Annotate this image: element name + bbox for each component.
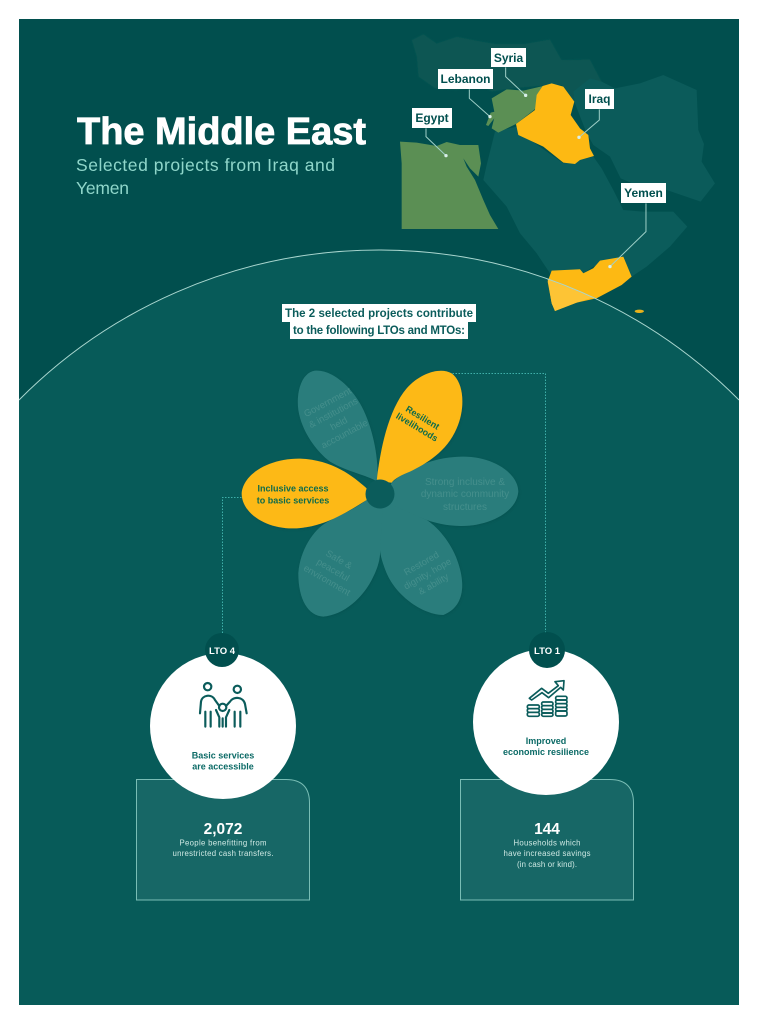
label: Yemen: Yemen [624, 186, 663, 200]
map: Syria [492, 86, 543, 133]
petal: governments [298, 371, 378, 482]
label: Egypt [412, 108, 452, 128]
label: Lebanon [438, 69, 493, 89]
petal text: governments: & institutions [307, 396, 360, 431]
icon: family [200, 683, 247, 727]
arc line [19, 250, 739, 400]
petal: resilient livelihoods [377, 371, 462, 483]
stat caption [172, 838, 274, 858]
petal text: inclusive access: Inclusive access [257, 484, 329, 494]
map: Iraq [516, 83, 594, 164]
subtitle [76, 155, 335, 198]
circle text: Basic services [192, 750, 254, 760]
petal text: governments: Government [302, 385, 354, 420]
flower centre [366, 480, 394, 508]
petal text: dignity: Restored [402, 550, 441, 578]
panel: stat box right [460, 780, 634, 900]
petal text: dignity: dignity, hope [402, 556, 454, 592]
circle text [192, 750, 254, 772]
stat: 2,072: 2,072 [204, 821, 242, 838]
petal text: resilient livelihoods: livelihoods [394, 411, 440, 444]
circle: LTO 1 [473, 632, 619, 795]
icon: growth chart with coins [527, 681, 567, 716]
circle text: Improved [526, 736, 566, 746]
petal: community structures [383, 457, 518, 526]
petal text: inclusive access: to basic services [257, 496, 329, 506]
label: Iraq: Iraq [588, 92, 611, 106]
badge: LTO 1 [529, 632, 565, 668]
lower arc section [19, 250, 739, 1005]
badge: LTO 4 [205, 633, 239, 667]
petal text: community [421, 477, 509, 513]
stat: 144: 144 [534, 821, 560, 838]
stat caption: People benefitting from [180, 838, 266, 848]
petal text: governments: accountable [320, 418, 370, 451]
flower diagram [242, 371, 518, 617]
circle: LTO 4: LTO 4 [209, 646, 236, 657]
stat caption: Households which [514, 838, 580, 848]
circle: LTO 1: LTO 1 [534, 646, 561, 657]
petal text: resilient livelihoods: Resilient [404, 404, 441, 432]
petal text: environment: Safe & [324, 548, 354, 572]
map: Lebanon [486, 111, 496, 126]
circle text: are accessible [192, 762, 254, 772]
map: Yemen [548, 203, 646, 313]
petal text: inclusive access [257, 484, 329, 506]
petal text: governments [301, 385, 371, 452]
petal text: environment: environment [301, 563, 352, 599]
petal text: environment: peaceful [314, 557, 351, 584]
petal text: governments: held [329, 415, 350, 433]
subtitle: Yemen [76, 178, 129, 198]
circle: LTO 4 [150, 633, 296, 799]
label: Iraq [585, 89, 614, 109]
label: Lebanon: Lebanon [440, 72, 490, 86]
map: Arabian peninsula [483, 127, 687, 277]
petal: dignity [380, 500, 462, 615]
petal text: community: dynamic community [421, 489, 509, 500]
petal text: resilient livelihoods [394, 401, 445, 444]
label: Syria: Syria [494, 51, 524, 65]
title: The Middle East [77, 111, 366, 153]
stat caption: (in cash or kind). [517, 860, 577, 869]
stat caption: have increased savings [504, 849, 591, 858]
subtitle: Selected projects from Iraq and [76, 155, 335, 175]
section heading: to the following LTOs and MTOs: [293, 325, 465, 337]
petal: peaceful environment [298, 500, 383, 617]
circle text [503, 736, 589, 757]
map: Egypt [400, 142, 498, 229]
circle text: economic resilience [503, 747, 589, 757]
label: Egypt: Egypt [415, 111, 449, 125]
petal text: community: structures [443, 502, 487, 513]
panel: stat box left [136, 780, 310, 900]
dotted connector: LTO 1 [450, 374, 546, 636]
petal text: dignity [396, 546, 460, 603]
leader lines [426, 67, 599, 156]
petal text: community: Strong inclusive & [425, 477, 505, 488]
map: Turkey [412, 34, 602, 107]
stat caption [504, 838, 591, 869]
stat caption: unrestricted cash transfers. [172, 849, 274, 858]
label: Yemen [621, 183, 666, 203]
dotted connector: LTO 4 [222, 498, 244, 636]
map: Iran [573, 75, 715, 202]
map of the Middle East [400, 34, 715, 277]
petal text: environment [301, 542, 364, 599]
label: Syria [491, 48, 526, 67]
section heading [282, 304, 476, 339]
petal: inclusive access [242, 459, 367, 528]
petal text: dignity: & ability [417, 571, 451, 598]
map labels [412, 48, 666, 203]
section heading: The 2 selected projects contribute [285, 308, 473, 320]
